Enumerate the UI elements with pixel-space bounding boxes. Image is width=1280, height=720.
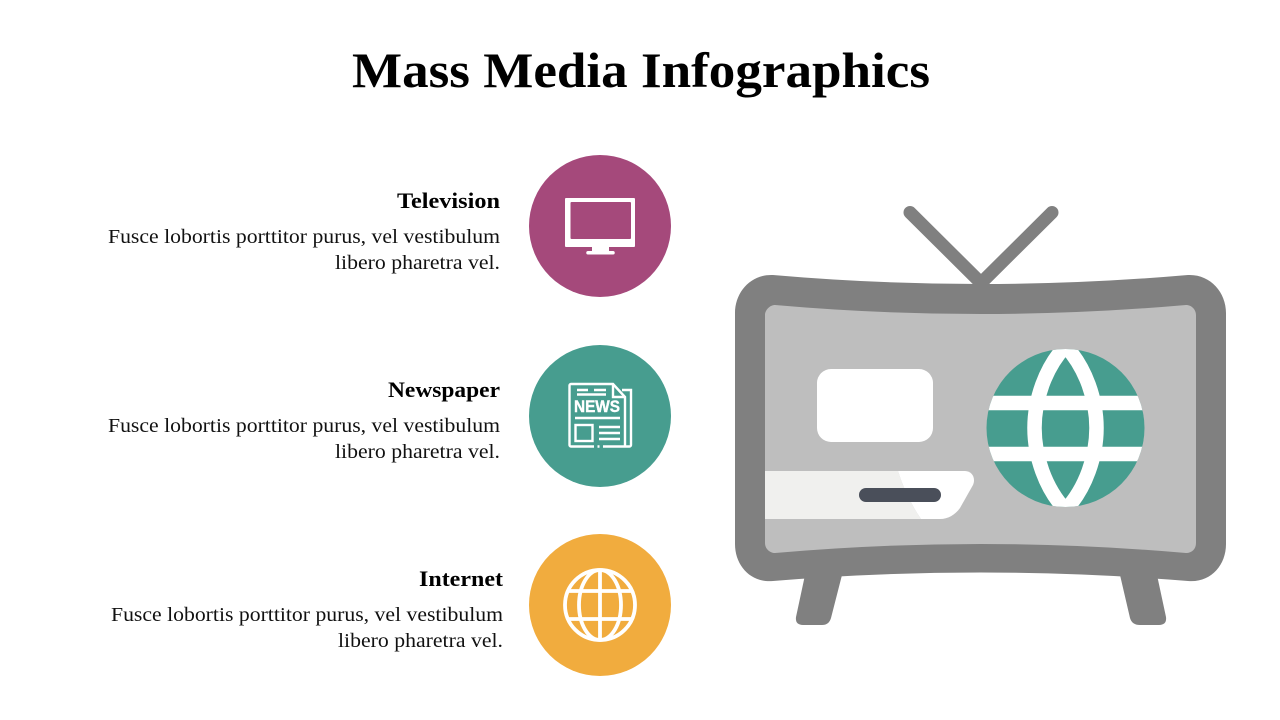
icon: internet badge	[529, 534, 671, 676]
icon: television badge	[529, 155, 671, 297]
panel: television row	[108, 155, 671, 297]
panel: internet row	[111, 534, 671, 676]
television legs	[796, 575, 1166, 625]
screen: globe	[986, 349, 1144, 507]
text block: internet description: libero pharetra vel.	[338, 630, 503, 652]
heading: television: Television	[397, 188, 500, 213]
title: Mass Media Infographics	[352, 42, 930, 98]
text block: television description	[108, 226, 500, 274]
text block: television description: libero pharetra vel.	[335, 252, 500, 274]
icon: newspaper badge	[529, 345, 671, 487]
icon: newspaper badge: NEWS	[574, 398, 620, 416]
television body	[735, 275, 1226, 581]
screen: lower third banner	[765, 471, 974, 519]
text block: television description: Fusce lobortis porttitor purus, vel vestibulum	[108, 226, 500, 248]
text block: newspaper description: libero pharetra vel.	[335, 441, 500, 463]
screen: white window	[817, 369, 933, 442]
television screen	[765, 305, 1196, 553]
heading: newspaper: Newspaper	[388, 377, 500, 402]
heading: internet: Internet	[419, 566, 504, 591]
antenna	[910, 212, 1052, 283]
text block: newspaper description: Fusce lobortis porttitor purus, vel vestibulum	[108, 415, 500, 437]
text block: internet description: Fusce lobortis porttitor purus, vel vestibulum	[111, 604, 503, 626]
illustration: retro television	[735, 212, 1226, 625]
text block: internet description	[111, 604, 503, 652]
text block: newspaper description	[108, 415, 500, 463]
panel: newspaper row	[108, 345, 671, 487]
